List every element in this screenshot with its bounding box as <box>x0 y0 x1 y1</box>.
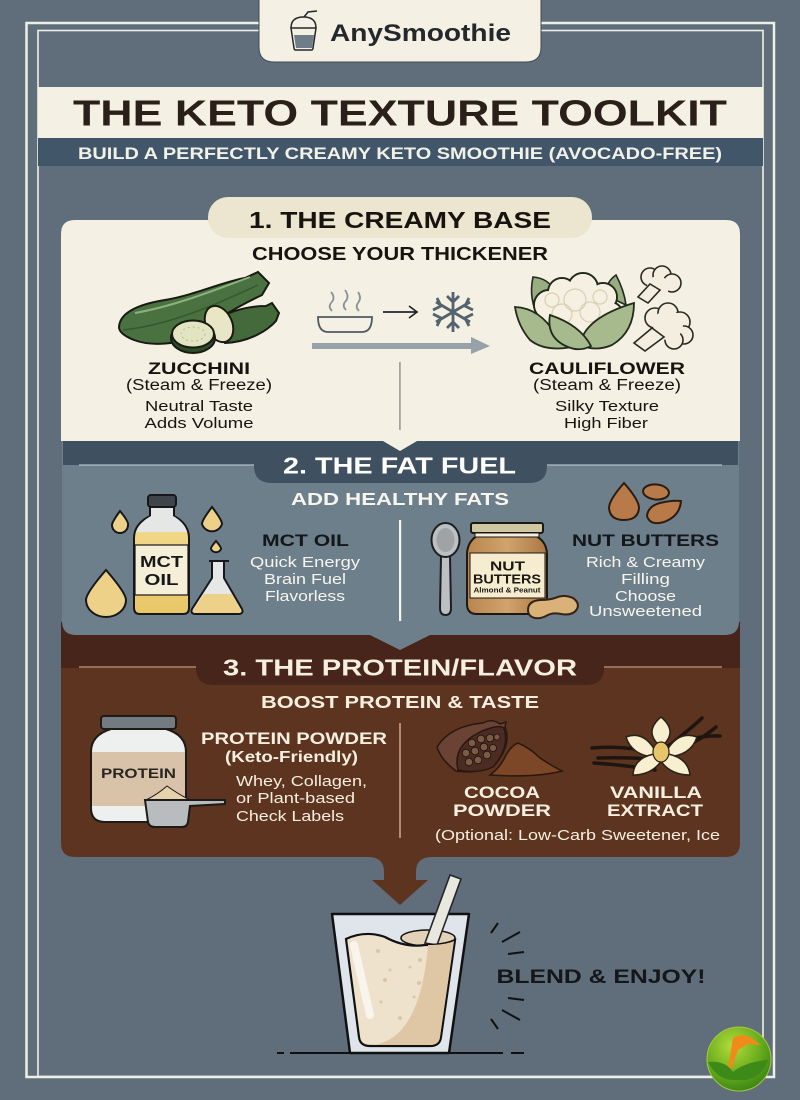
icon: nut butter jar: NUT <box>490 560 525 574</box>
protein powder text: or Plant-based <box>236 790 355 807</box>
subheading: ADD HEALTHY FATS <box>291 489 509 509</box>
icon: protein jar and scoop <box>91 716 225 827</box>
cocoa and vanilla labels: POWDER <box>453 801 551 820</box>
subtitle band <box>38 138 763 166</box>
arrow: steam to freeze <box>383 306 417 318</box>
protein powder text: Whey, Collagen, <box>236 773 367 790</box>
cocoa and vanilla labels: EXTRACT <box>607 801 704 820</box>
cauliflower text: Silky Texture <box>555 398 659 415</box>
icon: steam bowl <box>318 290 372 332</box>
cocoa and vanilla labels: COCOA <box>464 783 540 802</box>
zucchini text <box>126 359 272 432</box>
icon: nut butter jar <box>467 523 547 614</box>
panel: section 3 protein and flavor <box>61 622 740 905</box>
icon: cocoa pod and powder <box>437 721 562 776</box>
nut butters text: Choose <box>615 588 676 605</box>
icon: snowflake <box>433 292 473 332</box>
brand name: AnySmoothie <box>330 20 511 47</box>
heading tab <box>254 447 547 483</box>
icon: corner leaf medallion <box>707 1027 771 1091</box>
heading tab: 3. THE PROTEIN/FLAVOR <box>223 654 577 680</box>
icon: MCT oil bottle, drops and flask: OIL <box>144 572 179 589</box>
icon: spoon <box>432 523 460 615</box>
nut butters text: Rich & Creamy <box>586 554 706 571</box>
icon: peanut <box>528 596 578 618</box>
callout: blend and enjoy <box>491 923 706 1029</box>
icon: nut butter jar: Almond & Peanut <box>474 586 541 594</box>
heading tab <box>208 197 592 238</box>
cauliflower text: High Fiber <box>564 415 648 432</box>
zucchini text: ZUCCHINI <box>148 359 250 378</box>
zucchini text: Neutral Taste <box>145 398 253 415</box>
title band: THE KETO TEXTURE TOOLKIT <box>73 92 727 134</box>
panel: section 2 fat fuel <box>62 441 739 650</box>
MCT oil text <box>250 531 361 605</box>
protein powder text: Check Labels <box>236 808 344 825</box>
subtitle band: BUILD A PERFECTLY CREAMY KETO SMOOTHIE (AVOCADO-FREE) <box>78 144 722 163</box>
icon: zucchini <box>119 272 279 353</box>
icon: cauliflower <box>515 266 693 351</box>
subheading: CHOOSE YOUR THICKENER <box>252 244 548 264</box>
MCT oil text: Brain Fuel <box>264 571 346 588</box>
icon: MCT oil bottle, drops and flask: MCT <box>140 554 183 571</box>
zucchini text: (Steam & Freeze) <box>126 377 272 394</box>
callout: blend and enjoy: BLEND & ENJOY! <box>496 967 706 988</box>
icon: vanilla flower and pods <box>592 717 720 775</box>
arrow: process flow <box>312 337 490 354</box>
heading tab: 1. THE CREAMY BASE <box>249 207 551 233</box>
icon: smoothie glass <box>277 875 524 1053</box>
MCT oil text: MCT OIL <box>262 531 349 550</box>
icon: nut butter jar: BUTTERS <box>473 572 541 586</box>
title band <box>38 87 763 138</box>
icon: MCT oil bottle, drops and flask <box>86 495 242 617</box>
MCT oil text: Flavorless <box>265 588 345 605</box>
protein powder text: PROTEIN POWDER <box>201 730 387 748</box>
nut butters text: Unsweetened <box>589 603 702 620</box>
panel: section 1 creamy base <box>61 197 740 451</box>
nut butters text: Filling <box>621 571 670 588</box>
subheading: BOOST PROTEIN & TASTE <box>261 692 539 712</box>
nut butters text <box>572 531 719 620</box>
icon: smoothie cup <box>291 11 317 50</box>
cocoa and vanilla labels <box>435 783 720 844</box>
cocoa and vanilla labels: (Optional: Low-Carb Sweetener, Ice <box>435 827 720 844</box>
heading tab <box>196 650 604 685</box>
icon: protein jar and scoop: PROTEIN <box>101 766 176 781</box>
protein powder text <box>201 730 387 825</box>
cocoa and vanilla labels: VANILLA <box>610 783 702 802</box>
protein powder text: (Keto-Friendly) <box>225 749 358 766</box>
cauliflower text <box>529 359 685 432</box>
cauliflower text: CAULIFLOWER <box>529 359 685 378</box>
straw <box>425 875 461 945</box>
heading tab: 2. THE FAT FUEL <box>283 452 516 478</box>
logo card <box>259 0 541 62</box>
cauliflower text: (Steam & Freeze) <box>533 377 681 394</box>
nut butters text: NUT BUTTERS <box>572 531 719 550</box>
icon: almonds <box>609 483 681 523</box>
zucchini text: Adds Volume <box>144 415 254 432</box>
MCT oil text: Quick Energy <box>250 554 361 571</box>
